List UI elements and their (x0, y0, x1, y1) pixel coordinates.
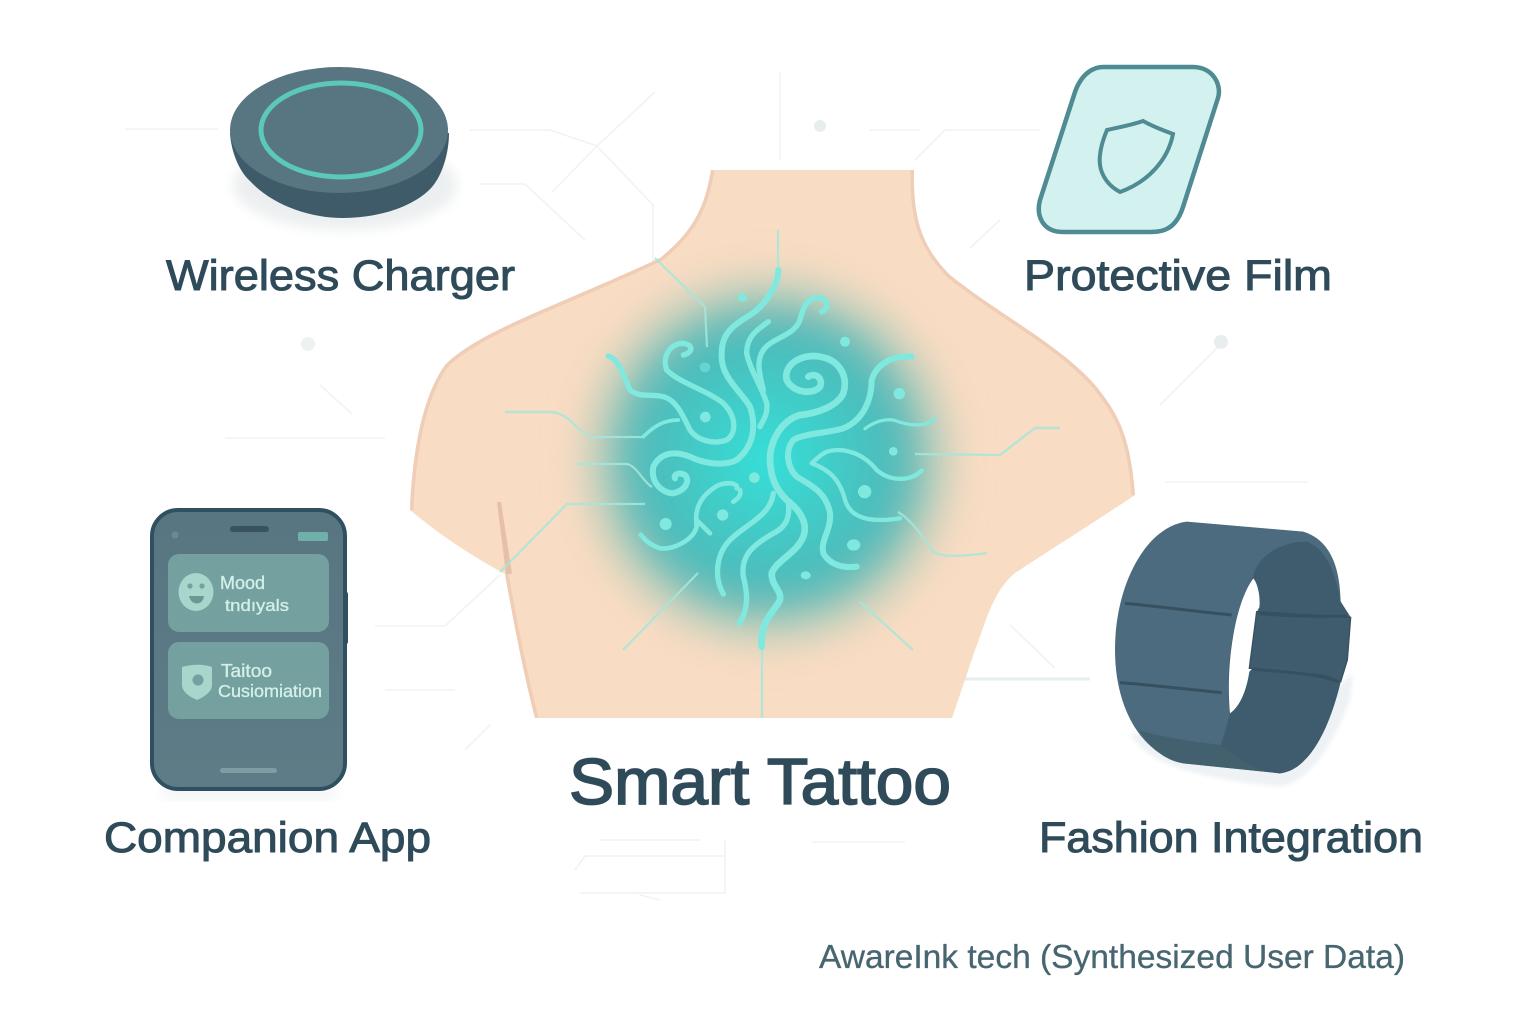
strand 2 (747, 322, 768, 427)
title: smart tattoo: Smart Tattoo (569, 745, 951, 818)
icon: phone companion app (152, 510, 348, 799)
background circuit lines (125, 72, 1308, 900)
source note: AwareInk tech (Synthesized User Data) (819, 938, 1405, 975)
label: protective film: Protective Film (1024, 252, 1332, 300)
tattoo dots (660, 294, 905, 579)
icon: protective film (1039, 67, 1219, 232)
band clasp (1249, 612, 1351, 682)
right short strand (865, 419, 935, 429)
label: wireless charger: Wireless Charger (166, 252, 515, 300)
band hole (1229, 578, 1260, 713)
label: fashion integration: Fashion Integration (1039, 814, 1423, 862)
icon: shield (182, 665, 212, 700)
card: mood trends: Mood (220, 573, 265, 593)
armpit crease (497, 502, 512, 574)
card: tattoo customisation: Taitoo (221, 661, 272, 681)
card: mood trends (168, 554, 329, 632)
band inner dark surface (1221, 542, 1351, 773)
tattoo swirl pattern (608, 270, 935, 647)
lower strand (718, 493, 773, 594)
card: tattoo customisation (168, 642, 329, 719)
top right curl (759, 298, 827, 390)
left branch (643, 420, 678, 437)
card: tattoo customisation: Cusiomiation (218, 681, 322, 701)
right spiral strand (788, 356, 912, 567)
band seams (1120, 603, 1347, 693)
icon: wireless charger (230, 67, 457, 230)
icon: smiley face (178, 573, 214, 611)
tattoo glow (568, 260, 968, 660)
lower strand middle (739, 503, 789, 623)
body silhouette (410, 170, 1135, 718)
main spiral and lower strand (762, 356, 845, 647)
lower left hook (641, 483, 740, 549)
top strand (653, 270, 778, 493)
band lower rim (1138, 700, 1323, 773)
tattoo faint circuit lines (500, 230, 1060, 718)
icon: shield outline (1100, 121, 1173, 192)
card: mood trends: tndıyals (225, 596, 289, 615)
left curl (608, 343, 734, 442)
icon: fashion band (1115, 522, 1353, 787)
right lower strand (812, 450, 922, 520)
label: companion app: Companion App (104, 814, 431, 862)
